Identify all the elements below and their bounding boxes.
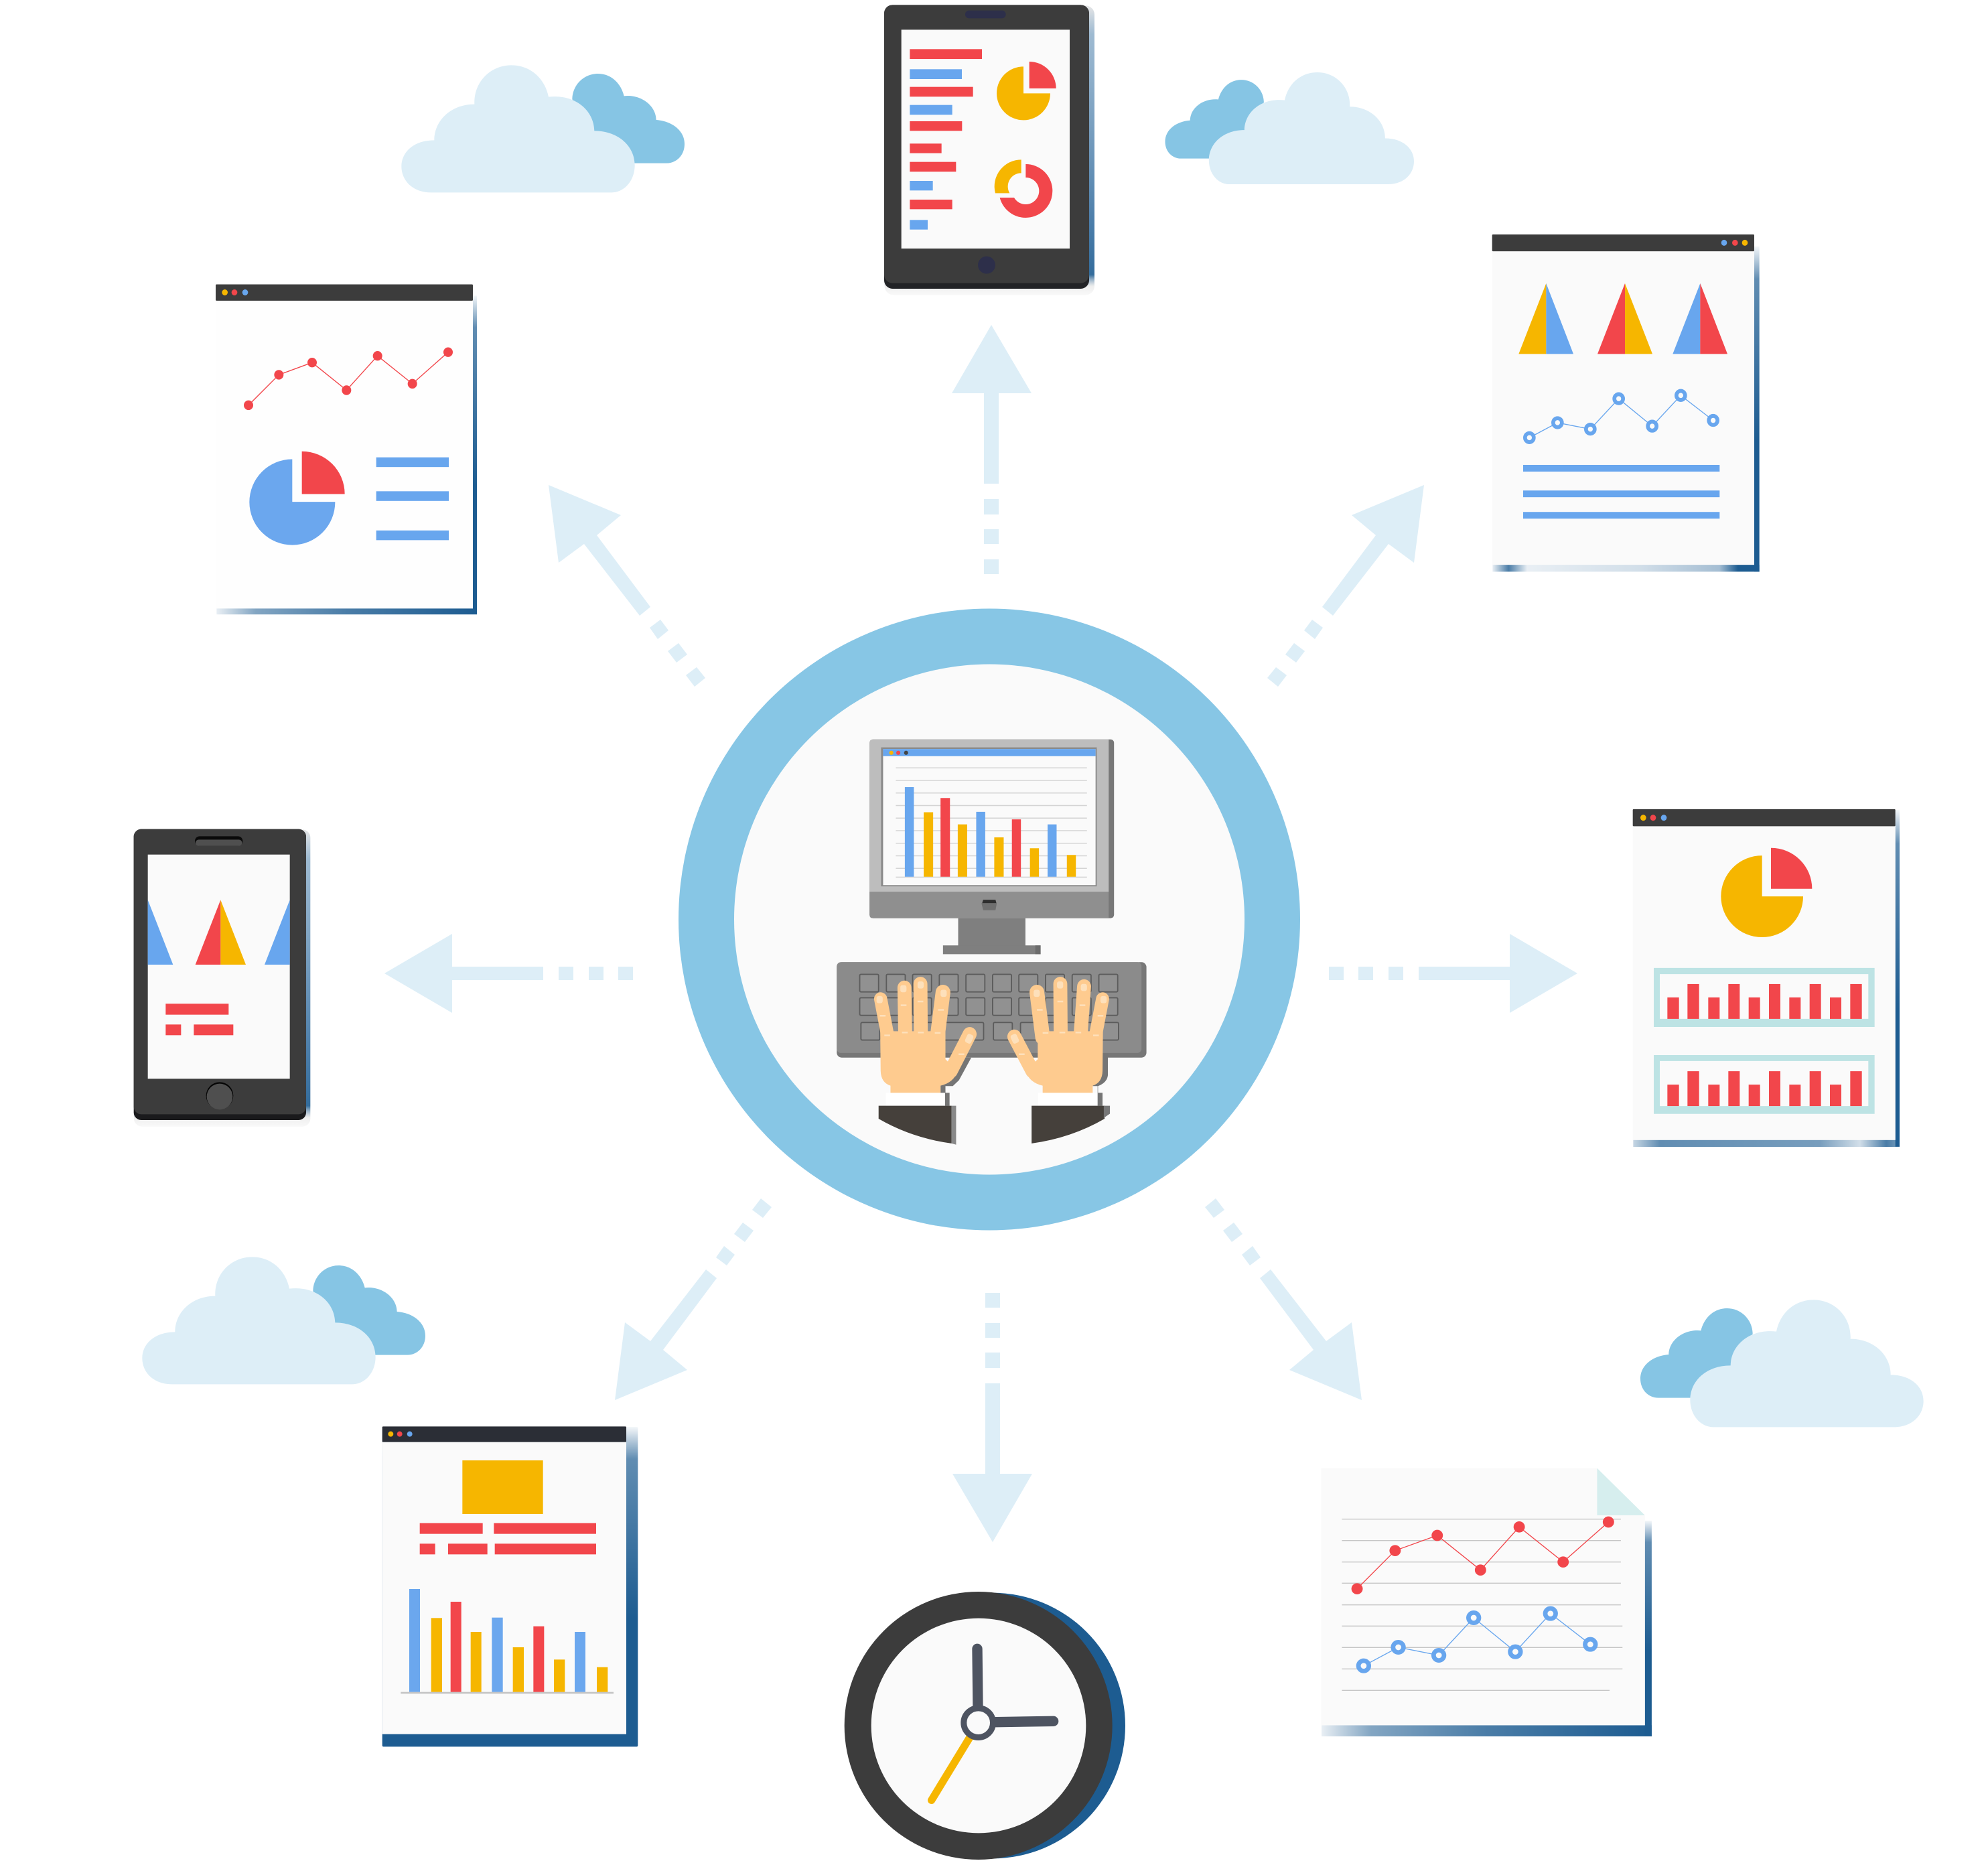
page shadow right [1896,810,1900,1147]
clock rim [845,1592,1113,1860]
pie chart [1721,848,1812,937]
red text lines [420,1523,596,1554]
window title bar [1633,809,1896,826]
blue ring line chart [1525,391,1717,442]
central ring [679,608,1300,1230]
cloud: bottom right [1640,1300,1924,1427]
page [216,301,473,608]
tablet body [884,5,1089,289]
page shadow bottom [1322,1725,1652,1736]
donut chart [995,159,1052,218]
page shadow bottom [1633,1140,1900,1147]
phone screen [148,855,290,1079]
phone with triangles [134,829,310,1127]
clock blue shadow [859,1593,1125,1858]
arrow: lower right to line chart page [1205,1198,1362,1400]
dog-eared page with two line charts [1321,1468,1652,1736]
hour and minute hands [964,1649,1054,1737]
clock [845,1592,1125,1860]
arrow: upper right to report [1267,485,1424,687]
text lines [376,458,449,540]
arrow: right to report [1329,934,1577,1013]
bar panel one [1654,968,1875,1027]
yellow image block [462,1460,543,1514]
cloud: bottom left [142,1257,425,1384]
page [1633,826,1896,1140]
window title bar [216,284,473,301]
red text lines [165,1004,233,1035]
phone body [134,829,306,1120]
arrow: upper left to report [549,485,705,687]
triangle charts [148,900,290,965]
arrow: down to clock [952,1293,1032,1542]
monitor [869,740,1114,918]
second hand [932,1737,970,1800]
bar chart [401,1589,614,1694]
report page: triangles, ring line and text lines [1492,234,1760,571]
blue ring line chart [1358,1608,1595,1671]
phone shadow [134,829,310,1127]
text lines [1523,465,1719,519]
right hand [1010,981,1107,1144]
page [1321,1468,1645,1725]
folded corner [1597,1468,1645,1515]
monitor bar chart [896,768,1087,877]
page shadow right [1754,247,1760,571]
person typing at a computer [837,740,1147,1145]
monitor stand [943,918,1041,954]
page [1492,251,1754,565]
horizontal bars [910,49,982,230]
arrow: up to tablet [952,325,1032,574]
arrow: left to phone [384,934,633,1013]
page shadow [382,1427,638,1746]
arrow: lower left to bar chart report [615,1198,772,1400]
pie chart [997,62,1056,120]
page shadow bottom [1492,565,1760,571]
tablet shadow [885,5,1094,295]
red line chart [1352,1517,1614,1594]
red line chart [244,347,453,410]
report page: header blocks and bar chart [382,1426,638,1746]
report page: line, pie and text lines [216,284,477,614]
triangle charts [1518,283,1727,354]
left hand [877,981,974,1145]
right sleeve shadow [1104,1106,1110,1118]
hand shadows [940,1053,1108,1106]
page shadow right [1645,1521,1652,1736]
page shadow right [473,295,477,613]
clock face [871,1618,1086,1833]
report page: pie and two bar panels [1633,809,1900,1147]
keyboard [837,962,1147,1058]
tablet with bar list and pie charts [884,5,1094,295]
page shadow bottom [216,608,477,614]
cloud: top right [1165,72,1414,184]
tablet screen [902,29,1070,249]
grid lines [1342,1519,1622,1690]
cloud: top left [401,65,685,192]
bar panel two [1654,1055,1875,1114]
pie chart [249,452,345,545]
central disc [734,665,1245,1175]
window title bar [1492,234,1754,251]
window title bar [382,1426,626,1442]
page [382,1442,626,1734]
